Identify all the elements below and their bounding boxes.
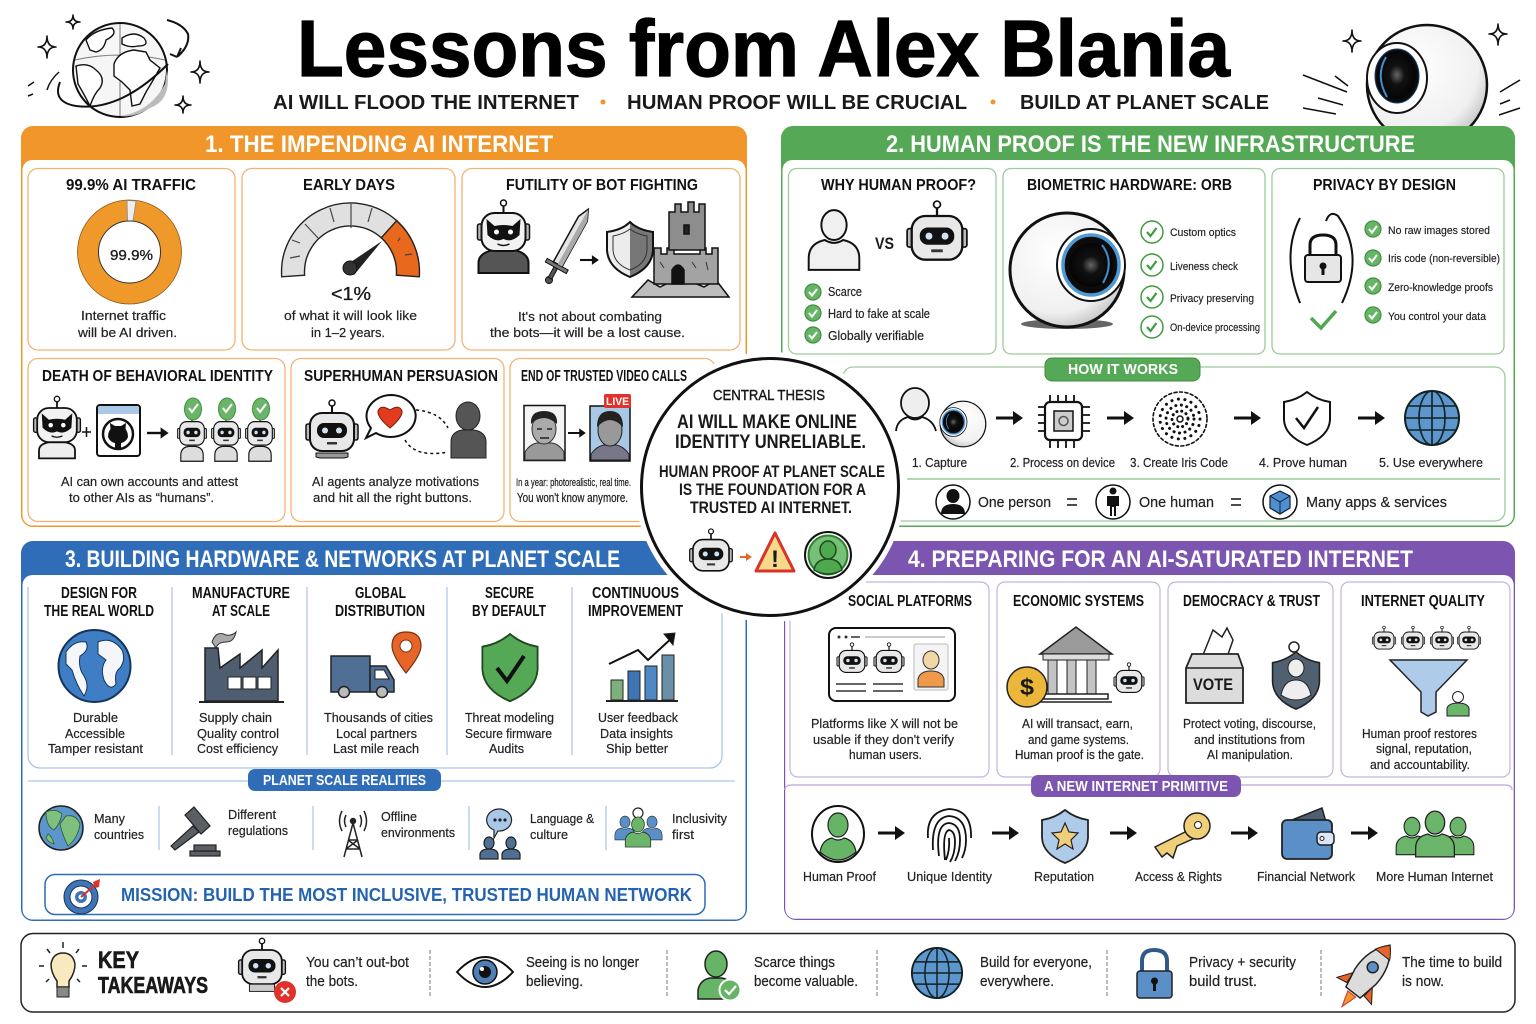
icon: shield — [607, 222, 653, 277]
card: early days — [242, 168, 455, 350]
arrow — [568, 428, 586, 438]
card: democracy and trust: AI manipulation. — [1207, 747, 1293, 762]
icon: growth chart — [606, 633, 678, 701]
column: global distribution — [324, 585, 433, 756]
heading: key takeaways: TAKEAWAYS — [98, 972, 208, 998]
card: economic systems: AI will transact, earn, — [1022, 716, 1133, 731]
reality: offline environments: Offline — [381, 809, 417, 824]
list: why human proof: Globally verifiable — [828, 328, 924, 343]
central thesis circle: IS THE FOUNDATION FOR A — [679, 481, 866, 499]
takeaway: the time to build: The time to build — [1402, 955, 1502, 971]
callout: mission: MISSION: BUILD THE MOST INCLUSIVE, TRUSTED HUMAN NETWORK — [121, 885, 692, 905]
icon: robot to warning to human: ! — [771, 546, 779, 573]
card: internet quality — [1341, 582, 1510, 777]
column: design for the real world — [44, 585, 154, 756]
takeaway: privacy and security: build trust. — [1189, 974, 1257, 990]
list: orb features: Custom optics — [1170, 227, 1236, 239]
column: continuous improvement: User feedback — [598, 710, 678, 725]
takeaway: scarce things: Scarce things — [754, 955, 835, 971]
list: orb features: On-device processing — [1170, 322, 1260, 334]
icon: bank, coin and robot: $ — [1020, 674, 1034, 700]
reality: offline environments — [340, 809, 455, 857]
column: secure by default: Audits — [489, 741, 524, 756]
icon: bot funnel to human — [1372, 626, 1481, 716]
takeaway: out-bot — [239, 938, 409, 1003]
takeaway: privacy and security — [1137, 950, 1297, 998]
pill: planet scale realities — [248, 769, 441, 791]
reality: inclusivity first — [615, 808, 727, 847]
takeaway: out-bot: You can’t out-bot — [306, 955, 409, 971]
step 2: process on device: 2. Process on device — [1010, 455, 1115, 470]
card: superhuman persuasion: SUPERHUMAN PERSUASION — [304, 368, 498, 385]
step: human proof: Human Proof — [803, 869, 876, 884]
icon: ballot box — [1186, 628, 1243, 703]
column: secure by default: SECURE — [485, 585, 534, 602]
reality: different regulations: Different — [228, 807, 276, 822]
gauge — [282, 203, 419, 304]
card: futility of bot fighting: It's not about combating — [518, 309, 662, 324]
icon: green shield — [482, 634, 538, 701]
icon: orb — [1010, 213, 1125, 329]
list: why human proof: Scarce — [828, 284, 862, 299]
card: social platforms — [790, 582, 989, 777]
column: design for the real world: Durable — [73, 710, 118, 725]
heading: key takeaways — [98, 947, 208, 998]
card: end of trusted video calls: In a year: photorealistic, real time. — [516, 477, 631, 489]
column: design for the real world: THE REAL WORLD — [44, 603, 154, 620]
reality: different regulations — [171, 807, 288, 856]
card: democracy and trust: DEMOCRACY & TRUST — [1183, 593, 1320, 610]
central thesis circle: TRUSTED AI INTERNET. — [690, 499, 852, 517]
card: economic systems — [997, 582, 1160, 777]
column: global distribution: GLOBAL — [355, 585, 406, 602]
takeaway: scarce things — [698, 951, 858, 1000]
column: global distribution: Last mile reach — [333, 741, 419, 756]
arrow — [1358, 411, 1385, 425]
column: design for the real world: DESIGN FOR — [61, 585, 137, 602]
icon: feed with bots — [829, 628, 955, 701]
list: privacy features: Iris code (non-reversible) — [1388, 253, 1500, 265]
column: secure by default — [465, 585, 554, 756]
column: manufacture at scale: Supply chain — [199, 710, 272, 725]
column: continuous improvement — [588, 585, 683, 756]
reality: many countries: countries — [94, 827, 144, 842]
panel: how it works — [843, 358, 1505, 521]
arrow — [1351, 826, 1378, 840]
step 3: create iris code — [1130, 392, 1228, 470]
card: economic systems: and game systems. — [1028, 732, 1129, 747]
arrow — [1234, 411, 1261, 425]
step 1: capture: 1. Capture — [912, 455, 967, 470]
icon: light bulb — [39, 942, 87, 997]
central thesis circle — [642, 358, 898, 616]
card: privacy by design: PRIVACY BY DESIGN — [1313, 177, 1456, 194]
takeaway: build for everyone — [912, 948, 1092, 998]
column: secure by default: Secure firmware — [465, 726, 552, 741]
column: manufacture at scale: Cost efficiency — [197, 741, 278, 756]
card: democracy and trust — [1168, 582, 1333, 777]
step: reputation: Reputation — [1034, 869, 1094, 884]
panel: section 4 AI-saturated internet — [784, 541, 1515, 920]
reality: inclusivity first: first — [672, 827, 694, 842]
step 1: capture — [896, 388, 986, 470]
takeaway: the time to build: is now. — [1402, 974, 1444, 990]
central thesis circle: CENTRAL THESIS — [713, 387, 825, 404]
card: death of behavioral identity: to other AIs as “humans”. — [69, 490, 214, 505]
column: design for the real world: Tamper resistant — [48, 741, 143, 756]
heading: key takeaways: KEY — [98, 947, 139, 974]
reality: different regulations: regulations — [228, 823, 288, 838]
card: death of behavioral identity: AI can own accounts and attest — [61, 474, 238, 489]
arrow — [878, 826, 905, 840]
column: global distribution: DISTRIBUTION — [335, 603, 425, 620]
arrow — [147, 427, 169, 439]
card: early days: of what it will look like — [284, 308, 417, 323]
icon: live deepfake video — [590, 394, 631, 461]
icon: globe with orbit — [28, 15, 209, 117]
column: global distribution: Thousands of cities — [324, 710, 433, 725]
column: continuous improvement: Ship better — [606, 741, 669, 756]
icon: heart speech bubble — [366, 395, 416, 438]
reality: offline environments: environments — [381, 825, 455, 840]
step 5: use everywhere: 5. Use everywhere — [1379, 455, 1483, 470]
icon: orb eye — [1303, 24, 1520, 145]
column: design for the real world: Accessible — [65, 726, 125, 741]
central thesis circle: HUMAN PROOF AT PLANET SCALE — [659, 463, 885, 481]
icon: shield person — [1273, 642, 1319, 709]
panel: section 2 human proof — [781, 126, 1515, 527]
card: futility of bot fighting: FUTILITY OF BOT FIGHTING — [506, 177, 698, 194]
arrow — [580, 255, 599, 265]
pill: a new internet primitive — [1031, 775, 1241, 797]
card: 99.9% AI traffic: will be AI driven. — [77, 325, 177, 340]
card: superhuman persuasion: and hit all the right buttons. — [313, 490, 472, 505]
reality: many countries: Many — [94, 811, 125, 826]
heading: section 2: 2. HUMAN PROOF IS THE NEW INFRASTRUCTURE — [886, 131, 1415, 158]
panel: key takeaways — [21, 932, 1515, 1020]
pill: planet scale realities: PLANET SCALE REALITIES — [263, 773, 426, 789]
heading: section 4: 4. PREPARING FOR AN AI-SATURATED INTERNET — [908, 546, 1413, 573]
subtitle strip: AI WILL FLOOD THE INTERNET — [273, 91, 579, 114]
step: access and rights — [1135, 813, 1222, 884]
takeaway: out-bot: the bots. — [306, 974, 358, 990]
icon: sword — [537, 203, 599, 289]
card: end of trusted video calls — [510, 358, 715, 522]
icon: lock with check — [1290, 214, 1353, 328]
equation: one person one human many apps — [936, 485, 1447, 519]
central thesis circle: IDENTITY UNRELIABLE. — [675, 431, 866, 453]
list: privacy features — [1365, 221, 1500, 323]
column: manufacture at scale — [192, 585, 290, 756]
step: access and rights: Access & Rights — [1135, 869, 1222, 884]
card: end of trusted video calls: END OF TRUSTED VIDEO CALLS — [521, 368, 687, 385]
pill: a new internet primitive: A NEW INTERNET PRIMITIVE — [1044, 779, 1228, 795]
panel: section 1 the impending AI internet — [21, 126, 747, 527]
list: why human proof — [805, 284, 930, 343]
step: more human internet — [1376, 811, 1493, 884]
step: financial network: Financial Network — [1257, 869, 1355, 884]
icon: truck and pin — [331, 632, 421, 698]
reality: language and culture: Language & — [530, 811, 594, 826]
pill: how it works — [1045, 358, 1200, 381]
step: financial network — [1257, 808, 1355, 884]
vs label: VS — [875, 234, 894, 253]
icon: pixelated photo — [524, 406, 565, 460]
card: economic systems: Human proof is the gate. — [1015, 747, 1144, 762]
card: end of trusted video calls: You won't know anymore. — [517, 491, 628, 505]
takeaway: seeing is no longer believing — [457, 955, 639, 990]
icon: live deepfake video: LIVE — [606, 396, 629, 408]
card: superhuman persuasion: AI agents analyze motivations — [312, 474, 479, 489]
card: why human proof: WHY HUMAN PROOF? — [821, 177, 976, 194]
dashed influence path — [405, 410, 448, 454]
icon: ballot box: VOTE — [1193, 675, 1233, 694]
card: democracy and trust: Protect voting, discourse, — [1183, 716, 1316, 731]
subtitle strip: BUILD AT PLANET SCALE — [1020, 91, 1269, 114]
step 4: prove human — [1259, 392, 1347, 470]
column: continuous improvement: CONTINUOUS — [592, 585, 679, 602]
takeaway: build for everyone: Build for everyone, — [980, 955, 1092, 971]
donut chart: 99.9% — [110, 247, 153, 264]
icon: bank, coin and robot — [1007, 627, 1144, 707]
step 3: create iris code: 3. Create Iris Code — [1130, 455, 1228, 470]
step 4: prove human: 4. Prove human — [1259, 455, 1347, 470]
card: social platforms: Platforms like X will not be — [811, 716, 958, 731]
step: unique identity: Unique Identity — [907, 869, 992, 884]
gauge: <1% — [331, 284, 371, 304]
column: secure by default: Threat modeling — [465, 710, 554, 725]
card: social platforms: SOCIAL PLATFORMS — [848, 593, 972, 610]
list: privacy features: Zero-knowledge proofs — [1388, 282, 1493, 294]
takeaway: scarce things: become valuable. — [754, 974, 858, 990]
icon: blue globe — [58, 630, 130, 702]
arrow — [992, 826, 1019, 840]
reality: language and culture — [480, 809, 594, 859]
card: internet quality: and accountability. — [1370, 757, 1470, 772]
callout: mission — [45, 874, 705, 914]
central thesis circle: AI WILL MAKE ONLINE — [677, 411, 857, 433]
card: social platforms: usable if they don't verify — [813, 732, 954, 747]
card: death of behavioral identity: DEATH OF BEHAVIORAL IDENTITY — [42, 368, 274, 385]
arrow — [1231, 826, 1258, 840]
card: 99.9% AI traffic: Internet traffic — [81, 308, 167, 323]
card: biometric hardware orb: BIOMETRIC HARDWARE: ORB — [1027, 177, 1232, 194]
arrow — [1107, 411, 1134, 425]
heading: section 1: 1. THE IMPENDING AI INTERNET — [205, 131, 553, 158]
donut chart — [78, 200, 182, 304]
equation: one person one human many apps: One person — [978, 494, 1051, 511]
card: early days: in 1–2 years. — [311, 325, 385, 340]
takeaway: privacy and security: Privacy + security — [1189, 955, 1297, 971]
reality: language and culture: culture — [530, 827, 568, 842]
card: internet quality: Human proof restores — [1362, 726, 1477, 741]
takeaway: the time to build — [1325, 932, 1502, 1020]
subtitle strip — [273, 91, 1269, 114]
title: Lessons from Alex Blania — [297, 4, 1230, 93]
list: why human proof: Hard to fake at scale — [828, 306, 930, 321]
reality: many countries — [39, 806, 144, 850]
step: human proof — [803, 806, 876, 884]
list: orb features: Liveness check — [1170, 261, 1238, 273]
card: superhuman persuasion — [291, 358, 504, 522]
column: manufacture at scale: MANUFACTURE — [192, 585, 290, 602]
card: democracy and trust: and institutions from — [1194, 732, 1305, 747]
list: orb features: Privacy preserving — [1170, 293, 1254, 305]
card: futility of bot fighting — [462, 168, 740, 350]
column: global distribution: Local partners — [336, 726, 417, 741]
step: unique identity — [907, 809, 992, 884]
arrow — [996, 411, 1023, 425]
icon: castle — [632, 202, 729, 297]
column: secure by default: BY DEFAULT — [472, 603, 546, 620]
card: internet quality: signal, reputation, — [1376, 741, 1472, 756]
column: manufacture at scale: AT SCALE — [212, 603, 270, 620]
step 5: use everywhere — [1379, 391, 1483, 470]
card: privacy by design — [1272, 168, 1504, 354]
card: social platforms: human users. — [849, 747, 922, 762]
subtitle strip: HUMAN PROOF WILL BE CRUCIAL — [627, 91, 967, 114]
equation: one person one human many apps: One human — [1139, 494, 1214, 511]
icon: robot — [907, 201, 967, 260]
step 2: process on device — [1010, 395, 1115, 470]
icon: robot — [306, 400, 358, 458]
column: continuous improvement: IMPROVEMENT — [588, 603, 683, 620]
icon: robot to warning to human — [690, 529, 851, 578]
card: biometric hardware orb — [1003, 168, 1265, 354]
icon: target — [64, 879, 100, 914]
card: 99.9% AI traffic — [28, 168, 235, 350]
equation: one person one human many apps: Many apps & services — [1306, 494, 1447, 511]
panel: section 3 building hardware — [21, 541, 747, 921]
takeaway: build for everyone: everywhere. — [980, 974, 1054, 990]
list: privacy features: No raw images stored — [1388, 225, 1490, 237]
step: more human internet: More Human Internet — [1376, 869, 1493, 884]
takeaway: seeing is no longer believing: Seeing is no longer — [526, 955, 639, 971]
icon: factory — [199, 632, 284, 702]
card: death of behavioral identity — [28, 358, 285, 522]
step: reputation — [1034, 810, 1094, 884]
icon: target person — [451, 402, 486, 458]
card: economic systems: ECONOMIC SYSTEMS — [1013, 593, 1144, 610]
card: why human proof — [788, 168, 996, 354]
reality: inclusivity first: Inclusivity — [672, 811, 727, 826]
icon: human outline — [809, 210, 859, 270]
list: orb features — [1141, 221, 1260, 338]
heading: section 3: 3. BUILDING HARDWARE & NETWORKS AT PLANET SCALE — [65, 546, 620, 573]
takeaway: seeing is no longer believing: believing. — [526, 974, 583, 990]
card: 99.9% AI traffic: 99.9% AI TRAFFIC — [66, 177, 196, 194]
icon: evil robot — [478, 200, 530, 273]
card: futility of bot fighting: the bots—it will be a lost cause. — [490, 325, 685, 340]
column: manufacture at scale: Quality control — [197, 726, 279, 741]
card: early days: EARLY DAYS — [303, 177, 395, 194]
arrow — [1110, 826, 1137, 840]
icon: three attested robots — [177, 398, 275, 461]
column: continuous improvement: Data insights — [600, 726, 673, 741]
list: privacy features: You control your data — [1388, 311, 1487, 323]
card: internet quality: INTERNET QUALITY — [1361, 593, 1486, 610]
icon: robot plus github account — [34, 396, 140, 458]
pill: how it works: HOW IT WORKS — [1068, 362, 1178, 378]
